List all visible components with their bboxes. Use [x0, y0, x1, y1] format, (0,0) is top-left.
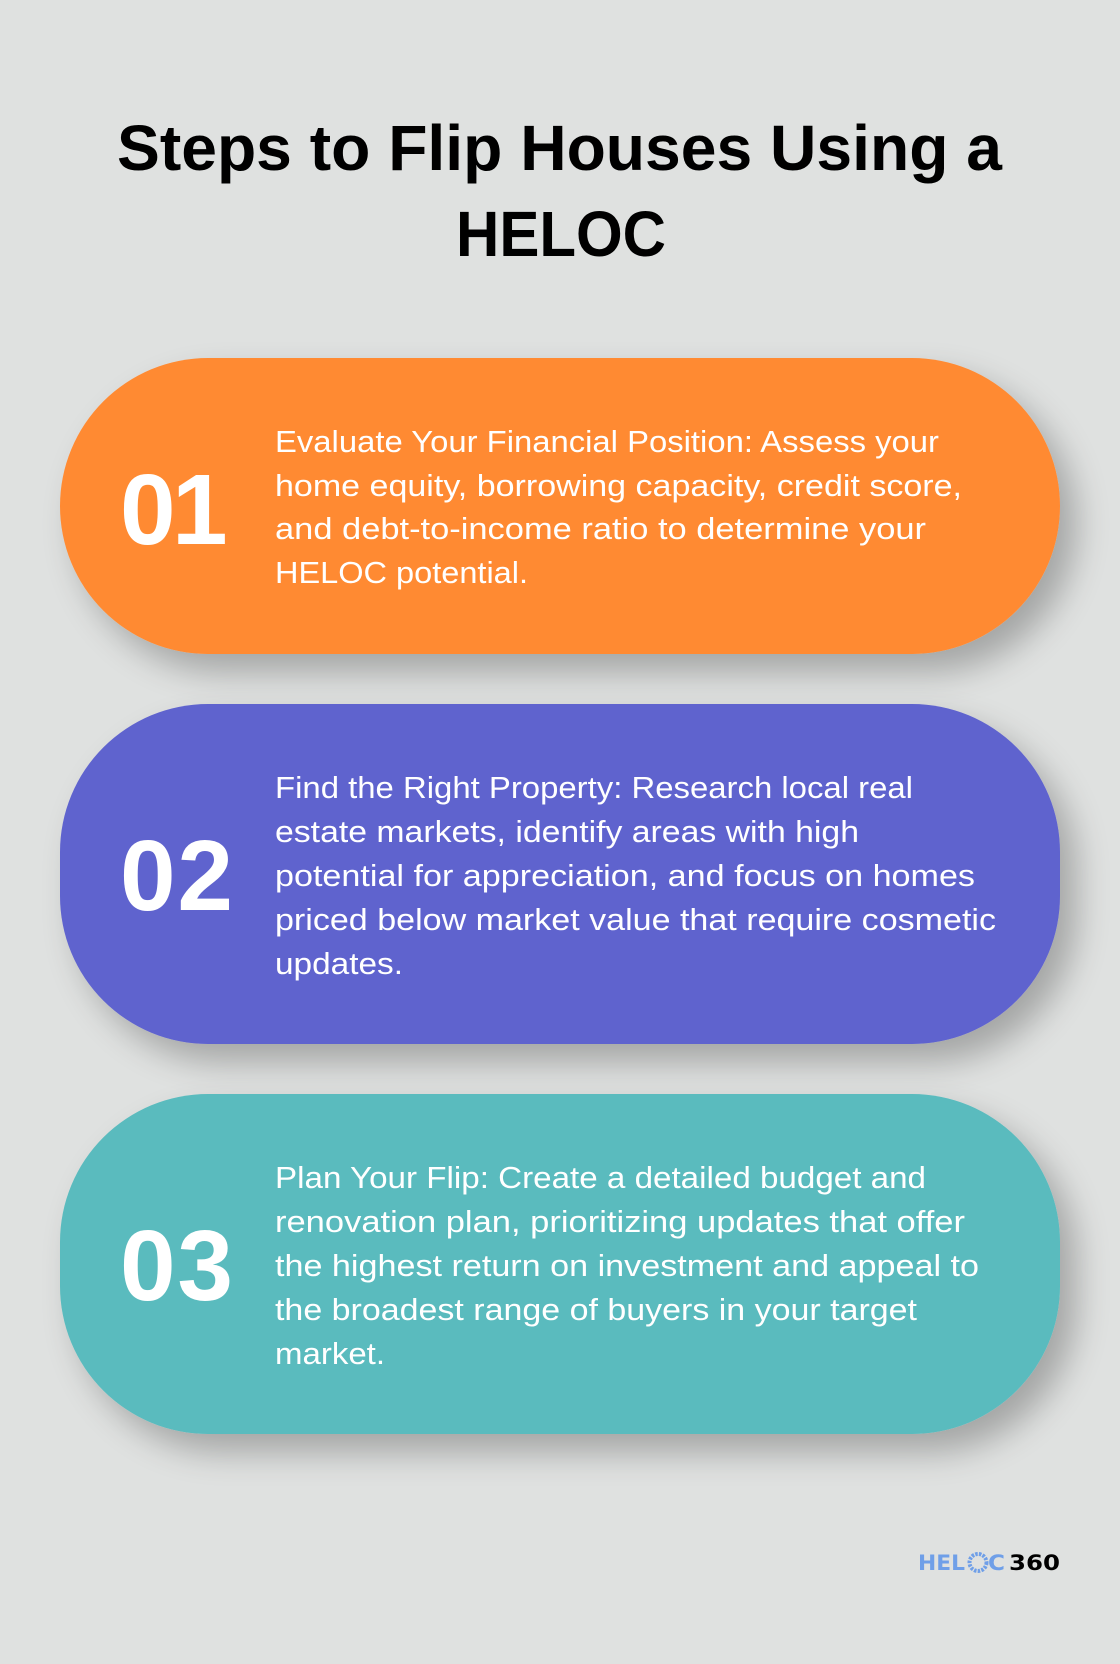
step 1 text [275, 424, 962, 590]
step 3 text: renovation plan, prioritizing updates that offer [275, 1204, 965, 1239]
step 1 text: home equity, borrowing capacity, credit score, [275, 468, 962, 503]
step 1 text: and debt-to-income ratio to determine your [275, 511, 926, 546]
step 3 text: market. [275, 1336, 385, 1371]
panel: step 3 [60, 1094, 1060, 1434]
step 2 text: estate markets, identify areas with high [275, 814, 859, 849]
step 2 number: 02 [120, 820, 233, 932]
title: HELOC [456, 198, 666, 270]
step 2 text: updates. [275, 946, 403, 981]
icon: swirl O [970, 1554, 986, 1571]
step 3 pill background [60, 1094, 1060, 1434]
logo: HELOC360 [918, 1551, 1060, 1575]
step 1 text: HELOC potential. [275, 555, 528, 590]
step 2 text: priced below market value that require cosmetic [275, 902, 996, 937]
step 1 number: 01 [120, 454, 228, 566]
logo: HELOC360: HEL [918, 1551, 965, 1575]
step 3 number: 03 [120, 1210, 233, 1322]
step 2 text: Find the Right Property: Research local real [275, 770, 913, 805]
title: Steps to Flip Houses Using a [117, 112, 1002, 184]
step 3 text: Plan Your Flip: Create a detailed budget and [275, 1160, 926, 1195]
panel: step 1 [60, 358, 1060, 654]
step 2 pill background [60, 704, 1060, 1044]
step 1 pill background [60, 358, 1060, 654]
step 3 text: the broadest range of buyers in your target [275, 1292, 917, 1327]
logo: HELOC360: 360 [1009, 1551, 1060, 1575]
panel: step 2 [60, 704, 1060, 1044]
step 1 text: Evaluate Your Financial Position: Assess your [275, 424, 939, 459]
step 2 text: potential for appreciation, and focus on homes [275, 858, 975, 893]
step 3 text [275, 1160, 979, 1371]
step 3 text: the highest return on investment and appeal to [275, 1248, 979, 1283]
title [117, 112, 1002, 270]
step 2 text [275, 770, 996, 981]
logo: HELOC360: C [988, 1551, 1005, 1575]
